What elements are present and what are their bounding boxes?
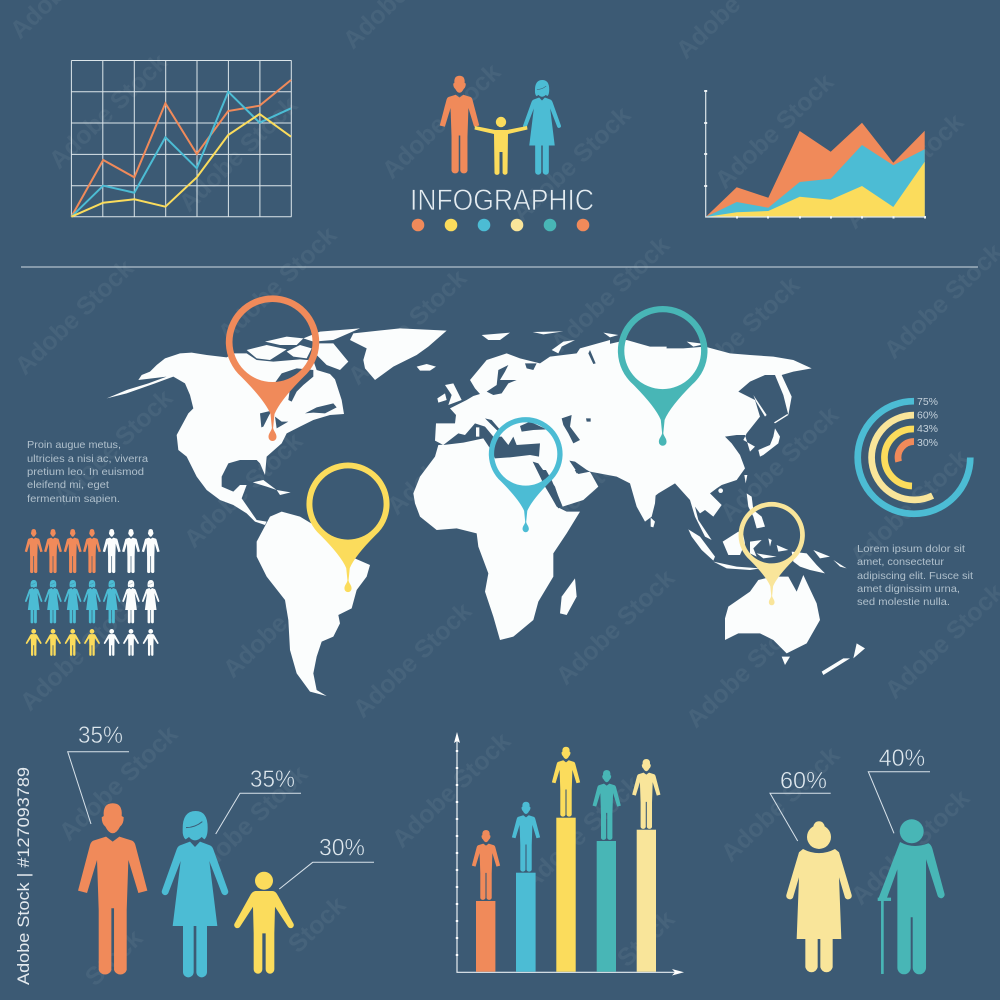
red sea and persian gulf — [533, 461, 598, 508]
left text block: ultricies a nisi ac, viverra — [27, 453, 148, 465]
left text block: Proin augue metus, — [27, 439, 121, 451]
left text block — [27, 439, 148, 505]
watermark pattern: Adobe Stock — [546, 231, 675, 357]
woman figure — [162, 811, 228, 977]
right text block: Lorem ipsum dolor sit — [857, 543, 965, 555]
vertical credit text: Adobe Stock | #127093789 — [14, 767, 33, 985]
title colour dots — [412, 219, 589, 231]
pin: russia — [618, 306, 708, 446]
watermark pattern: Stock — [612, 905, 680, 973]
world map — [107, 328, 865, 696]
watermark pattern: Adobe Stock — [15, 590, 144, 716]
man callout 35%: 35% — [78, 722, 123, 749]
left text block: pretium leo. In euismod — [27, 466, 144, 478]
watermark pattern: Adobe Stock — [184, 760, 313, 886]
pin: southeast asia — [739, 502, 805, 605]
watermark pattern: Adobe Stock — [218, 557, 347, 683]
old man callout 40%: 40% — [879, 745, 925, 772]
watermark pattern: Adobe Stock — [681, 607, 810, 733]
watermark pattern: Adobe Stock — [551, 564, 680, 690]
watermark pattern: Adobe Stock — [840, 108, 969, 234]
watermark pattern: Adobe Stock — [517, 770, 646, 896]
left text block: fermentum sapien. — [27, 493, 120, 505]
east asia and islands — [650, 342, 847, 573]
left text block: eleifend mi, eget — [27, 479, 109, 491]
watermark pattern: Adobe Stock — [387, 727, 516, 853]
pin: north america — [226, 295, 319, 441]
watermark pattern: Stock — [283, 891, 351, 959]
old woman figure — [786, 821, 852, 972]
line chart — [71, 60, 292, 217]
woman callout 35% — [216, 766, 301, 834]
child callout 30% — [279, 835, 374, 889]
watermark pattern: Adobe Stock — [54, 720, 183, 846]
pictogram rows — [25, 529, 160, 656]
pin: south america — [306, 463, 390, 592]
people bar chart — [454, 732, 684, 976]
men on bars — [472, 747, 660, 900]
radial chart — [858, 396, 970, 514]
watermark pattern: Adobe Stock — [715, 401, 844, 527]
watermark pattern: Stock — [80, 924, 148, 992]
right text block: amet, consectetur — [857, 556, 945, 568]
right text block: adipiscing elit. Fusce sit — [857, 570, 973, 582]
family icon — [440, 76, 561, 175]
watermark pattern: Adobe Stock — [710, 68, 839, 194]
axes — [454, 732, 684, 976]
old woman callout 60%: 60% — [780, 767, 827, 794]
watermark pattern: Adobe Stock — [44, 48, 173, 174]
greenland and south america — [257, 328, 447, 696]
woman callout 35%: 35% — [250, 766, 295, 793]
watermark pattern: Adobe Stock — [846, 784, 975, 910]
old man callout 40% — [868, 745, 930, 833]
watermark pattern: Adobe Stock — [382, 394, 511, 520]
watermark pattern: Adobe Stock — [10, 254, 139, 380]
watermark pattern: Adobe Stock — [348, 597, 477, 723]
watermark pattern: Adobe Stock — [49, 384, 178, 510]
north america — [107, 328, 360, 525]
child callout 30%: 30% — [319, 835, 365, 862]
watermark pattern: Adobe Stock — [845, 444, 974, 570]
watermark pattern: Adobe Stock — [174, 91, 303, 217]
watermark pattern: Adobe Stock — [676, 271, 805, 397]
children row — [26, 629, 159, 656]
bars — [476, 818, 656, 972]
watermark pattern: Adobe Stock — [512, 434, 641, 560]
watermark pattern: Adobe Stock — [507, 101, 636, 227]
africa arabia central asia australia — [413, 331, 865, 675]
watermark pattern: Adobe Stock — [343, 264, 472, 390]
man figure — [78, 803, 147, 975]
radial chart: 60% — [917, 410, 938, 422]
divider — [21, 266, 978, 268]
area chart — [704, 90, 926, 218]
title: INFOGRAPHIC — [410, 184, 594, 217]
men row — [25, 529, 160, 573]
right text block: sed molestie nulla. — [857, 596, 950, 608]
watermark pattern: Adobe Stock — [213, 221, 342, 347]
old man figure — [878, 819, 945, 974]
watermark pattern: Adobe Stock — [716, 741, 845, 867]
child figure — [234, 872, 294, 974]
pin: north africa — [489, 417, 563, 532]
radial chart: 43% — [917, 423, 938, 435]
radial chart: 75% — [917, 396, 938, 408]
man callout 35% — [68, 722, 129, 824]
watermark pattern: Adobe Stock — [179, 427, 308, 553]
europe — [435, 340, 610, 470]
right text block — [857, 543, 973, 608]
women row — [25, 580, 159, 623]
right text block: amet dignissim urna, — [857, 583, 960, 595]
seniors group — [770, 745, 945, 974]
watermark pattern: Adobe Stock — [377, 58, 506, 184]
radial chart: 30% — [917, 437, 938, 449]
family percentages group — [68, 722, 374, 977]
old woman callout 60% — [770, 767, 831, 841]
